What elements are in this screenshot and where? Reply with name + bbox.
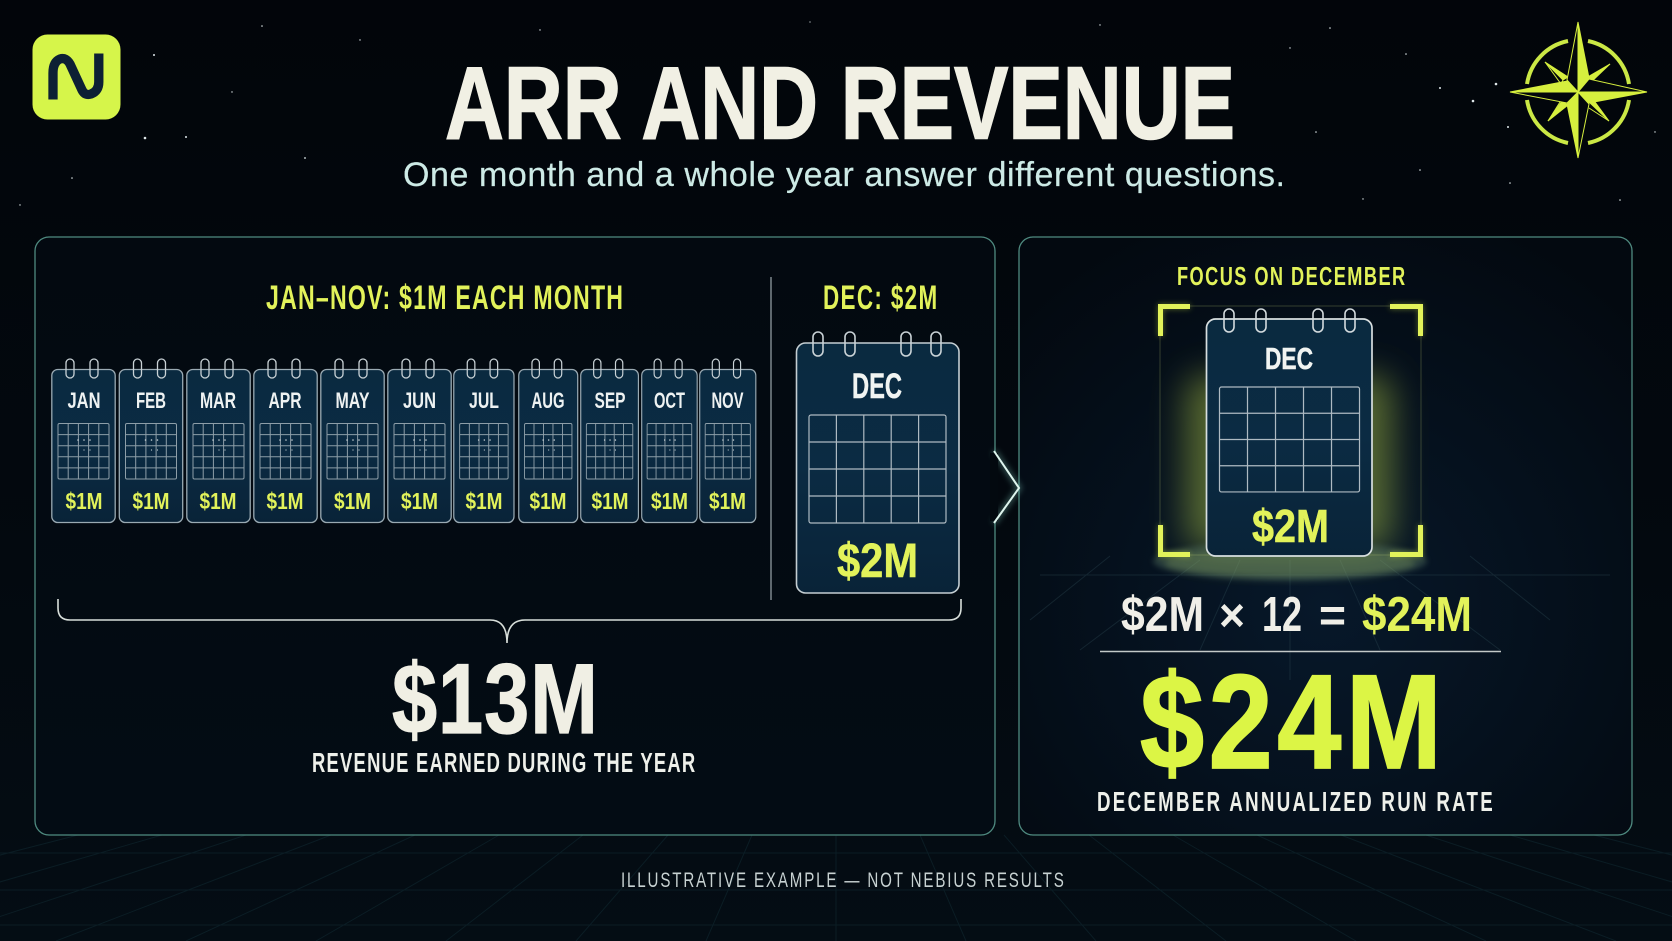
calendar: MAY: MAY (336, 388, 370, 413)
calendar: FEB: $1M (132, 488, 170, 514)
calendar: DEC large: $2M (837, 535, 918, 588)
heading: Jan to Nov: JAN–NOV: $1M EACH MONTH (266, 280, 623, 317)
equation (1121, 588, 1472, 642)
calendar: JUN: JUN (403, 388, 436, 413)
calendar: DEC large: DEC (852, 367, 902, 406)
caption: run rate: DECEMBER ANNUALIZED RUN RATE (1097, 786, 1493, 817)
glow behind calendar (1185, 375, 1393, 550)
value: $13M: $13M (392, 644, 598, 755)
calendar: JUL: JUL (469, 388, 499, 413)
caption: revenue earned: REVENUE EARNED DURING THE YEAR (312, 747, 695, 778)
calendar: OCT (642, 359, 697, 522)
subtitle: One month and a whole year answer different questions. (403, 156, 1285, 194)
divider (770, 277, 772, 600)
calendar: NOV (700, 359, 756, 522)
calendar: DEC focused: DEC (1265, 341, 1313, 376)
calendar: NOV: $1M (709, 488, 746, 514)
calendar: AUG: $1M (530, 488, 566, 514)
calendar: SEP: SEP (594, 388, 626, 413)
calendar: FEB (119, 359, 183, 522)
calendar: MAY: $1M (334, 488, 371, 514)
icon: compass (1510, 22, 1647, 158)
calendar: AUG (519, 359, 578, 522)
title: ARR AND REVENUE (445, 46, 1235, 160)
divider (1100, 650, 1501, 652)
footer note: ILLUSTRATIVE EXAMPLE — NOT NEBIUS RESULTS (621, 867, 1064, 892)
heading: Dec: DEC: $2M (823, 279, 937, 317)
cardinal points (1510, 22, 1647, 158)
equation: 12 (1262, 588, 1302, 642)
panel: December annualized run rate (990, 237, 1632, 835)
calendar: DEC focused (1206, 309, 1372, 556)
calendar: FEB: FEB (136, 388, 166, 413)
calendar: JUN: $1M (401, 488, 438, 514)
equation: $2M (1121, 588, 1204, 642)
calendar: APR: APR (268, 388, 302, 413)
spotlight floor (1030, 556, 1610, 680)
value: $24M: $24M (1140, 648, 1442, 797)
focus frame (1160, 306, 1421, 555)
calendar: OCT: OCT (654, 388, 685, 413)
chevron arrow (990, 451, 1019, 523)
calendar: JUL (454, 359, 514, 522)
equation: = (1319, 589, 1346, 641)
panel: revenue earned during the year (35, 237, 995, 835)
calendar: DEC large (796, 332, 959, 593)
calendar: APR: $1M (266, 488, 304, 514)
background perspective floor (0, 835, 1672, 941)
equation: $24M (1362, 588, 1472, 642)
calendar: JUN (388, 359, 451, 522)
calendar: SEP: $1M (592, 488, 628, 514)
calendar: APR (254, 359, 317, 522)
equation: × (1219, 589, 1245, 641)
calendar: MAR: MAR (200, 388, 236, 413)
calendar: JAN: $1M (66, 488, 102, 514)
calendar: NOV: NOV (712, 388, 744, 413)
calendar: AUG: AUG (532, 388, 564, 413)
calendar: DEC focused: $2M (1252, 500, 1329, 552)
calendar: SEP (581, 359, 638, 522)
icon: N logo (32, 34, 120, 120)
calendar: MAR (187, 359, 250, 522)
calendar: MAY (321, 359, 384, 522)
podium ellipse (1153, 541, 1427, 581)
brace (58, 599, 961, 643)
calendar: JAN: JAN (68, 388, 100, 413)
calendar: MAR: $1M (200, 488, 236, 514)
background stars (19, 21, 1656, 206)
calendar: OCT: $1M (651, 488, 688, 514)
ordinal points (1545, 62, 1610, 121)
heading: focus on December: FOCUS ON DECEMBER (1177, 262, 1405, 291)
calendar: JUL: $1M (466, 488, 502, 514)
calendar: JAN (52, 359, 115, 522)
